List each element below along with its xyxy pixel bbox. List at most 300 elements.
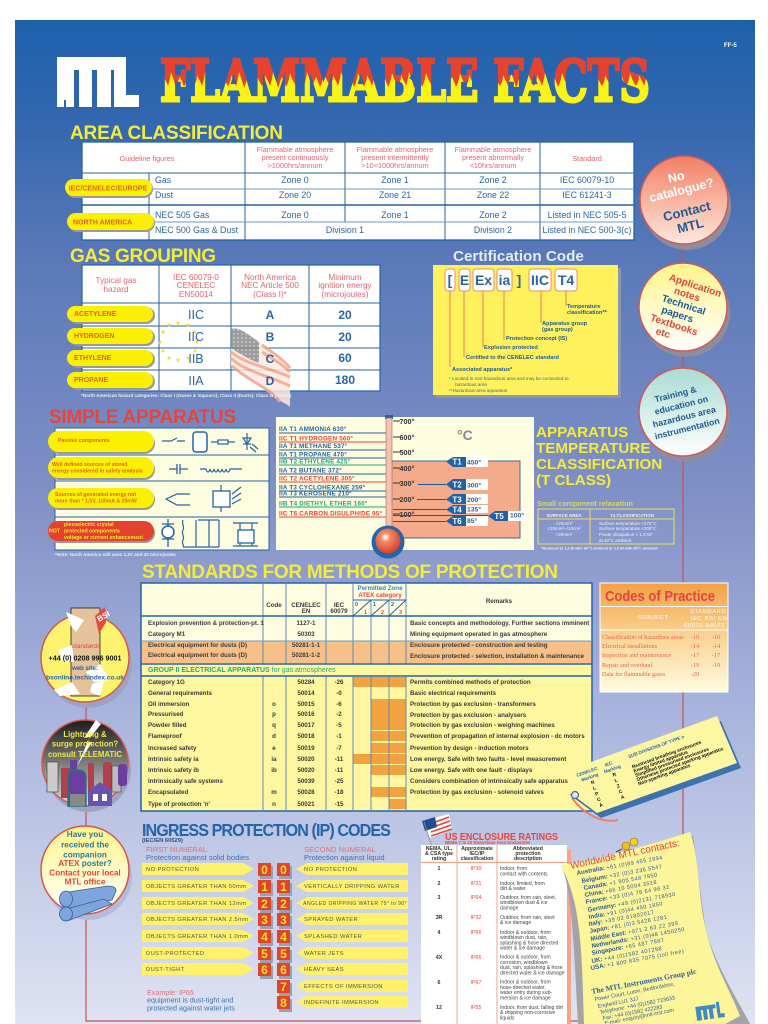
panel: certification code: **Hazardous-area apparatus — [449, 388, 508, 393]
bubble: application notes: Textbooks — [649, 313, 699, 339]
icon: standards booklet — [54, 607, 112, 696]
heading: simple apparatus: SIMPLE APPARATUS — [49, 407, 236, 428]
group II rows: Basic electrical requirements — [410, 690, 497, 697]
table: gas grouping: 20 — [338, 308, 352, 322]
upper rows: 50281-1-2 — [292, 652, 321, 659]
panel: worldwide MTL contacts note: Canada: +1 905 548 7850 — [583, 871, 658, 892]
IP number squares: 6 — [280, 963, 287, 977]
panel: simple apparatus: NOT — [49, 528, 61, 534]
group II rows: Flameproof — [148, 733, 183, 740]
group II rows: Protection by gas exclusion - solenoid valves — [410, 789, 544, 796]
table: gas grouping: hazard — [103, 285, 129, 294]
table: gas grouping: (microjoules) — [322, 290, 369, 299]
group II rows: Category 1G — [148, 679, 185, 686]
panel: temperature classification chart — [276, 415, 534, 558]
table: area classification: Flammable atmosphere — [257, 145, 333, 154]
panel: US enclosure ratings: US ENCLOSURE RATINGS — [445, 831, 558, 843]
panel: temperature classification chart: IIA T1 AMMONIA 630° — [279, 425, 347, 433]
panel: worldwide MTL contacts note: Worldwide MTL contacts: — [569, 838, 681, 872]
icon: thermometer: 400° — [400, 464, 414, 473]
icon: EU stars: ★ — [185, 322, 191, 329]
icon: rolled posters — [60, 886, 116, 921]
panel: worldwide MTL contacts note: Australia: +61 (0)89 455 2994 — [576, 854, 663, 877]
group II rows: d — [272, 733, 276, 740]
table: area classification: Guideline figures — [120, 154, 175, 163]
table: area classification: present abnormally — [462, 153, 524, 162]
table: area classification: <10hrs/annum — [470, 161, 516, 170]
icon: thermometer: 300° — [400, 479, 414, 488]
panel: US enclosure ratings: IP66 — [471, 955, 481, 961]
panel: codes of practice: Inspection and maintenance — [602, 652, 671, 659]
panel: certification code — [433, 265, 621, 398]
panel: US enclosure ratings: IEC/IP — [470, 851, 485, 857]
panel: certification code: Certified to the CENELEC standard — [466, 355, 560, 361]
table: area classification: Zone 2 — [479, 210, 507, 220]
header row: Code — [266, 602, 282, 609]
bubble: lightning and surge protection: Lightning & — [63, 730, 107, 739]
header row: 1 — [373, 602, 376, 608]
heading: ingress protection: INGRESS PROTECTION (IP) CODES — [142, 820, 390, 840]
icon: EU stars: ★ — [185, 355, 191, 362]
group II rows: 50014 — [297, 690, 315, 697]
panel: simple apparatus: voltage or current enhancement — [64, 535, 143, 541]
panel: US enclosure ratings: Indoor & outdoor, from — [500, 980, 551, 986]
pill: IEC/CENELEC/Europe: IEC/CENELEC/EUROPE — [69, 186, 148, 192]
panel: certification code: * Located in non-hazardous area and may be connected to — [449, 376, 569, 381]
table: gas grouping: IEC 60079-0 — [173, 273, 219, 282]
panel: worldwide MTL contacts note: Belgium: +32 (0)3 236 5547 — [581, 863, 663, 885]
table: gas grouping: 20 — [338, 330, 352, 344]
group II rows: o — [272, 701, 276, 708]
bubble: lightning and surge protection: consult TELEMATIC — [48, 750, 122, 759]
panel: US enclosure ratings: water & ice damage — [500, 946, 545, 952]
panel: US enclosure ratings: IP32 — [471, 915, 481, 921]
icon: thermometer: 100° — [400, 510, 414, 519]
panel: codes of practice: -17 — [691, 652, 699, 659]
bubble: BSI standards — [41, 607, 132, 708]
header row: 0 — [355, 602, 358, 608]
table: gas grouping: Minimum — [328, 273, 362, 282]
heading: apparatus temperature classification: APPARATUS — [536, 424, 628, 441]
table: gas grouping: ignition energy — [318, 281, 373, 290]
panel: worldwide MTL contacts note: UK: +44 (0)1582 407298 — [591, 945, 663, 965]
panel: simple apparatus: Well defined sources of stored — [52, 462, 127, 468]
IP number squares: 4 — [261, 930, 268, 944]
heading: area classification: AREA CLASSIFICATION — [70, 123, 283, 144]
tag: sub divisions of type n: Energy limited apparatus — [633, 749, 689, 775]
table: gas grouping: 180 — [335, 373, 355, 387]
panel: certification code: classification** — [567, 310, 608, 316]
table: area classification: Gas — [155, 175, 172, 185]
icon: lightning bolt — [77, 720, 101, 766]
tag: sub divisions of type n: R — [612, 772, 618, 779]
group II rows: Pressurised — [148, 711, 184, 718]
group II rows: Low energy. Safe with two faults - level measurement — [410, 756, 566, 763]
icon: EU stars: ★ — [160, 348, 166, 355]
table: area classification: Listed in NEC 505-5 — [548, 210, 626, 220]
panel: simple apparatus: energy considered in safety analysis — [52, 468, 143, 474]
IP second numeral arrows: EFFECTS OF IMMERSION — [304, 984, 383, 990]
bubble: application notes: etc — [654, 326, 672, 341]
upper rows — [148, 620, 589, 660]
panel: worldwide MTL contacts note: USA: +1 800 835 7075 (toll free) — [590, 948, 685, 972]
IP first numeral arrows: DUST-PROTECTED — [146, 951, 204, 957]
table: area classification: Zone 1 — [381, 210, 409, 220]
small component relaxation table: *Reduced to 1,2 W with 60°C ambient or 1,0 W with 80°C ambient — [541, 546, 658, 550]
group II rows: -0 — [336, 690, 342, 697]
panel: US enclosure ratings: & dripping non-corrosive — [500, 1010, 555, 1016]
panel: worldwide MTL contacts note: Netherlands: +31 (0)48 1450250 — [591, 926, 685, 950]
panel: worldwide MTL contacts note: Japan: +81 (0)3 5428 1281 — [589, 914, 668, 935]
panel: US enclosure ratings: 2 — [438, 881, 441, 887]
IP number squares: 1 — [280, 880, 287, 894]
group II rows: -2 — [336, 711, 342, 718]
IP number squares: 5 — [261, 947, 268, 961]
panel: US enclosure ratings: Abbreviated — [513, 846, 543, 852]
group II rows: Protection by gas exclusion - analysers — [410, 712, 527, 719]
panel: codes of practice: Repair and overhaul — [602, 662, 652, 669]
icon: standards booklet: standards — [72, 643, 101, 650]
group II rows: e — [272, 745, 276, 752]
panel: worldwide MTL contacts note: France: +33 (0)4 78 64 98 32 — [585, 884, 670, 906]
small component relaxation table: T4 CLASSIFICATION — [610, 513, 654, 518]
icon: EU stars: ★ — [175, 320, 181, 327]
group II rows: n — [272, 801, 276, 808]
table: area classification: Zone 2 — [479, 175, 507, 185]
panel: US enclosure ratings: Outdoor, from rain, sleet, — [500, 895, 556, 901]
footnote: gas categories: *North American hazard categories: Class I (Gases & Vapours); Class II (Dusts); Class III (Fibres) — [81, 393, 292, 398]
panel: US enclosure ratings: protection — [515, 851, 541, 857]
header row: 3 — [399, 610, 402, 616]
T class tags: T1 — [452, 458, 462, 466]
IP number squares: 3 — [280, 913, 287, 927]
panel: temperature classification chart: IIA T3 CYCLOHEXANE 259° — [279, 484, 366, 492]
panel: simple apparatus: more than * 1,5V, 100mA & 25mW — [55, 498, 137, 504]
panel: codes of practice: Data for flammable gases — [602, 671, 666, 678]
panel: codes of practice: STANDARD — [690, 609, 726, 615]
gas hazard pills: ETHYLENE — [74, 355, 112, 362]
panel: certification code: Temperature — [567, 304, 600, 310]
panel: codes of practice: Codes of Practice — [605, 589, 715, 605]
panel: temperature classification chart: IIC T2 ACETYLENE 305° — [279, 474, 355, 482]
panel: US enclosure ratings: NEMA 7 to 10 Hazardous Area Enclosures — [445, 840, 531, 845]
group II rows: Considers combination of intrinsically safe apparatus — [410, 778, 568, 785]
upper rows: 50281-1-1 — [292, 642, 321, 649]
small component relaxation table: Power dissipation < 1,3 W* — [599, 532, 653, 537]
panel: US enclosure ratings: 1 — [438, 866, 441, 872]
panel: US enclosure ratings: damage — [500, 906, 519, 912]
panel: simple apparatus: piezoelectric crystal — [64, 522, 114, 528]
table: area classification: IEC 61241-3 — [562, 190, 612, 200]
panel: US enclosure ratings: Approximate — [461, 846, 493, 852]
panel: worldwide MTL contacts note: Power Court, Luton, Bedfordshire, — [594, 981, 676, 1003]
panel: codes of practice: 60079-50072 — [684, 623, 725, 629]
group II rows: 50020 — [297, 767, 315, 774]
gas hazard pills: ACETYLENE — [74, 311, 117, 318]
table: standards for methods of protection — [141, 583, 592, 811]
tag: sub divisions of type n: Z — [616, 783, 621, 790]
header row: EN — [302, 608, 311, 615]
tag: sub divisions of type n: SUB DIVISIONS OF TYPE n — [627, 734, 685, 759]
header row: 2 — [381, 610, 384, 616]
small component relaxation table: at 40°C ambient — [599, 538, 632, 543]
tag: sub divisions of type n: C — [596, 796, 602, 803]
panel: US enclosure ratings: 12 — [436, 1005, 442, 1011]
upper rows: Enclosure protected - selection, installation & maintenance — [410, 653, 585, 660]
panel: codes of practice: IEC BS/ EN — [691, 616, 727, 622]
panel: simple apparatus: Passive components — [58, 438, 110, 444]
group II rows: Prevention by design - induction motors — [410, 745, 529, 752]
header row: CENELEC — [291, 602, 321, 609]
icon: thermometer: 200° — [400, 495, 414, 504]
panel: codes of practice: Classification of hazardous areas — [602, 634, 684, 641]
panel: codes of practice: -20 — [691, 671, 699, 678]
small component relaxation table: >20mm² — [556, 532, 573, 537]
subheading: standard reference: (IEC/EN 60529) — [142, 838, 183, 844]
upper rows: Enclosure protected - construction and testing — [410, 642, 548, 649]
table: gas grouping: IIC — [188, 330, 204, 344]
panel: certification code: Explosion protected — [484, 345, 538, 351]
IP first numeral arrows: OBJECTS GREATER THAN 12mm — [146, 901, 246, 907]
table: area classification: NEC 500 Gas & Dust — [155, 225, 239, 235]
IP number squares: 2 — [261, 897, 268, 911]
panel: codes of practice: -10 — [691, 634, 699, 641]
panel: US enclosure ratings: windblown dust & ice — [500, 900, 548, 906]
tag: sub divisions of type n: Restricted breathing enclosures — [631, 740, 703, 770]
panel: US enclosure ratings: Indoor, from dust, falling dirt — [500, 1005, 563, 1011]
bubble: catalogue: MTL — [676, 215, 705, 236]
group II rows: Encapsulated — [148, 789, 188, 796]
panel: worldwide MTL contacts note: Middle East: +971 2 63 22 399 — [590, 920, 679, 943]
panel: certification code: hazardous area — [455, 382, 487, 387]
panel: codes of practice: Electrical installations — [602, 643, 658, 650]
bubble: training: Training & — [653, 384, 698, 404]
group II rows: 50021 — [297, 801, 315, 808]
group II rows: ia — [271, 756, 277, 763]
IP number squares: 8 — [280, 996, 287, 1010]
icon: EU stars: ★ — [194, 339, 200, 346]
small component relaxation table: <20mm²-<10cm² — [547, 526, 581, 531]
panel: worldwide MTL contacts note: Fax: +44 (0)1582 422283 — [602, 1004, 663, 1022]
panel: certification code: Associated apparatus* — [452, 367, 513, 373]
icon: US flag — [231, 328, 290, 407]
header row: Permitted Zone — [357, 585, 403, 592]
tag: sub divisions of type n: L — [614, 778, 619, 784]
group II rows: Permits combined methods of protection — [410, 679, 531, 686]
panel: codes of practice: -19 — [712, 662, 720, 669]
icon: thermometer — [372, 415, 414, 558]
tag: sub divisions of type n: IEC — [604, 760, 614, 768]
upper rows: Mining equipment operated in gas atmosphere — [410, 631, 548, 638]
heading: apparatus temperature classification — [536, 424, 662, 489]
T class tags: 85° — [467, 517, 478, 525]
panel: US enclosure ratings: contact with contents — [500, 872, 548, 878]
T class tags: 100° — [510, 512, 524, 520]
bubble: BSI standards: bsonline.techindex.co.uk — [46, 674, 124, 682]
table: gas grouping: D — [266, 374, 275, 388]
panel: US enclosure ratings: IP55 — [471, 1005, 481, 1011]
IP number squares: 1 — [261, 880, 268, 894]
table: area classification: Zone 20 — [279, 190, 311, 200]
panel: simple apparatus — [48, 428, 269, 550]
logo: MTL — [57, 57, 139, 107]
column headings: IP numerals — [146, 845, 385, 862]
table: gas grouping: C — [266, 352, 275, 366]
upper rows: Explosion prevention & protection-pt. 1 — [148, 620, 264, 627]
group II rows: -1 — [336, 733, 342, 740]
panel: US enclosure ratings: dirt & water — [500, 886, 526, 892]
heading: apparatus temperature classification: TEMPERATURE — [536, 440, 650, 457]
table: gas grouping: A — [266, 308, 275, 322]
IP second numeral arrows: VERTICALLY DRIPPING WATER — [304, 884, 400, 890]
panel: US enclosure ratings: hose-directed water, — [500, 985, 546, 991]
table: gas grouping: 60 — [338, 351, 352, 365]
panel: US enclosure ratings: classification — [461, 856, 493, 862]
T class tags: T4 — [452, 506, 462, 514]
column headings: IP numerals: Protection against liquid — [304, 853, 385, 862]
panel: certification code: ia — [499, 272, 511, 288]
footnote: simple apparatus: *Note: North America still uses 1,2V and 20 microjoules — [55, 552, 176, 557]
group II rows: -7 — [336, 745, 342, 752]
table: area classification: present continuously — [262, 153, 329, 162]
panel: simple apparatus: Sources of generated energy not — [55, 492, 136, 498]
T class tags: 200° — [467, 496, 481, 504]
table: area classification: Zone 0 — [281, 210, 309, 220]
group II rows: Intrinsically safe systems — [148, 778, 224, 785]
group II rows: Oil immersion — [148, 701, 189, 708]
group II rows: Low energy. Safe with one fault - displays — [410, 767, 533, 774]
icon: EU stars: ★ — [175, 357, 181, 364]
icon: thermometer: 700° — [400, 417, 414, 426]
panel: worldwide MTL contacts note: Telephone: +44 (0)1582 723633 — [599, 995, 676, 1016]
tag: sub divisions of type n: L — [592, 785, 597, 792]
tag: sub divisions of type n: Marking — [603, 764, 622, 774]
IP first numeral arrows: OBJECTS GREATER THAN 50mm — [146, 884, 246, 890]
panel: certification code: ] — [517, 272, 521, 288]
panel: temperature classification chart: IIB T4 DIETHYL ETHER 160° — [279, 500, 368, 508]
IP second numeral arrows: HEAVY SEAS — [304, 967, 344, 973]
gas ignition temperature lines — [279, 433, 387, 517]
panel: US enclosure ratings: windblown dust, rain, — [500, 935, 548, 941]
bubble: ATEX poster: Have you — [67, 830, 103, 839]
IP second numeral arrows: ANGLED DRIPPING WATER 75° to 90° — [303, 901, 407, 907]
table: gas grouping: North America — [244, 273, 296, 282]
T class tags: T5 — [494, 512, 504, 521]
header row: 60079 — [330, 608, 348, 615]
panel: codes of practice: -14 — [712, 643, 720, 650]
table: gas grouping: NEC Article 500 — [241, 281, 299, 290]
T class tags: 450° — [467, 458, 481, 466]
bubble: catalogue: Contact — [661, 198, 713, 224]
bubble: training: hazardous area — [652, 404, 717, 430]
upper rows: Basic concepts and methodology. Further sections imminent — [410, 620, 589, 627]
gas hazard pills: PROPANE — [74, 377, 108, 384]
group II rows: 50015 — [297, 701, 315, 708]
IP65 example — [147, 988, 235, 1012]
panel: US enclosure ratings: Indoor, limited, from — [500, 881, 545, 887]
panel: simple apparatus: protected components — [64, 528, 120, 534]
panel: US enclosure ratings: IP66 — [471, 930, 481, 936]
panel: US enclosure ratings: corrosion, windblown — [500, 960, 548, 966]
bubble: catalogue — [640, 156, 731, 250]
small component relaxation table — [537, 499, 674, 550]
IP first numeral arrows: OBJECTS GREATER THAN 2.5mm — [146, 917, 248, 923]
table: area classification: Flammable atmosphere — [455, 145, 531, 154]
group II rows: 50019 — [297, 745, 315, 752]
group II rows: m — [271, 789, 277, 796]
table: area classification: Division 1 — [326, 225, 364, 235]
IP number squares — [258, 863, 292, 1012]
permitted zone bars — [353, 677, 406, 809]
table: area classification: Zone 22 — [477, 190, 509, 200]
pill: IEC/CENELEC/Europe — [65, 179, 153, 198]
IP first numeral arrows — [142, 863, 254, 975]
panel: US enclosure ratings: mersion & ice damage — [500, 996, 551, 1002]
table: area classification: Division 2 — [474, 225, 512, 235]
panel: US enclosure ratings: water entry during sub- — [500, 990, 552, 996]
icon: EU stars: ★ — [192, 329, 198, 336]
upper rows: Electrical equipment for dusts (D) — [148, 642, 247, 649]
panel: codes of practice: -14 — [691, 643, 699, 650]
panel: worldwide MTL contacts note: The MTL Instruments Group plc — [591, 967, 698, 996]
group II rows: Increased safety — [148, 745, 197, 752]
panel: US enclosure ratings: Indoor & outdoor, from — [500, 930, 551, 936]
T class tags: 300° — [467, 482, 481, 490]
icon: EU stars: ★ — [160, 329, 166, 336]
bubble: ATEX poster: Contact your local — [49, 868, 121, 878]
IP number squares: 2 — [280, 897, 287, 911]
bubble: ATEX poster: companion — [63, 850, 107, 860]
panel: certification code: E — [460, 272, 469, 288]
header row: ATEX category — [358, 592, 402, 599]
bubble: ATEX poster: ATEX poster? — [58, 859, 112, 868]
IP number squares: 5 — [280, 947, 287, 961]
table: area classification: NEC 505 Gas — [155, 210, 210, 220]
tag: sub divisions of type n: Marking — [581, 772, 599, 783]
small component relaxation table: SURFACE AREA — [546, 513, 582, 518]
table: gas grouping: CENELEC — [177, 281, 215, 290]
bubble: application notes: notes — [672, 286, 702, 305]
icon: EU stars: ★ — [166, 355, 172, 362]
bubble: ATEX poster — [41, 826, 132, 921]
panel: codes of practice: SUBJECT — [638, 615, 669, 621]
panel: certification code: [ — [448, 272, 453, 288]
small component relaxation table: Surface temperature <275°C — [599, 521, 657, 526]
icon: US flag small — [422, 814, 452, 850]
icon: push pin — [616, 838, 638, 852]
panel: temperature classification chart: IIA T1 PROPANE 470° — [279, 450, 347, 458]
header row: 1 — [364, 610, 367, 616]
bubble: BSI standards: +44 (0) 0208 996 9001 — [49, 654, 121, 662]
column headings: IP numerals: Protection against solid bodies — [146, 853, 249, 862]
tag: sub divisions of type n: Non-sparking apparatus — [637, 763, 692, 787]
panel: US enclosure ratings: 6 — [438, 980, 441, 986]
IP number squares: 0 — [280, 863, 287, 877]
small component relaxation table: <20mm² — [556, 521, 573, 526]
icon: industrial skyline — [47, 760, 127, 806]
IP first numeral arrows: OBJECTS GREATER THAN 1.0mm — [146, 934, 248, 940]
table: area classification: Zone 0 — [281, 175, 309, 185]
group II rows: -25 — [335, 778, 344, 785]
group II rows: 50284 — [297, 679, 315, 686]
small component relaxation table: Surface temperature <200°C — [599, 526, 657, 531]
column headings: IP numerals: SECOND NUMERAL — [304, 845, 376, 854]
panel: temperature classification chart: IIC T6 CARBON DISULPHIDE 95° — [279, 510, 383, 518]
header row — [266, 585, 513, 616]
IP second numeral arrows: NO PROTECTION — [304, 867, 357, 873]
bubble: application notes — [639, 263, 730, 357]
group II rows: -26 — [335, 679, 344, 686]
